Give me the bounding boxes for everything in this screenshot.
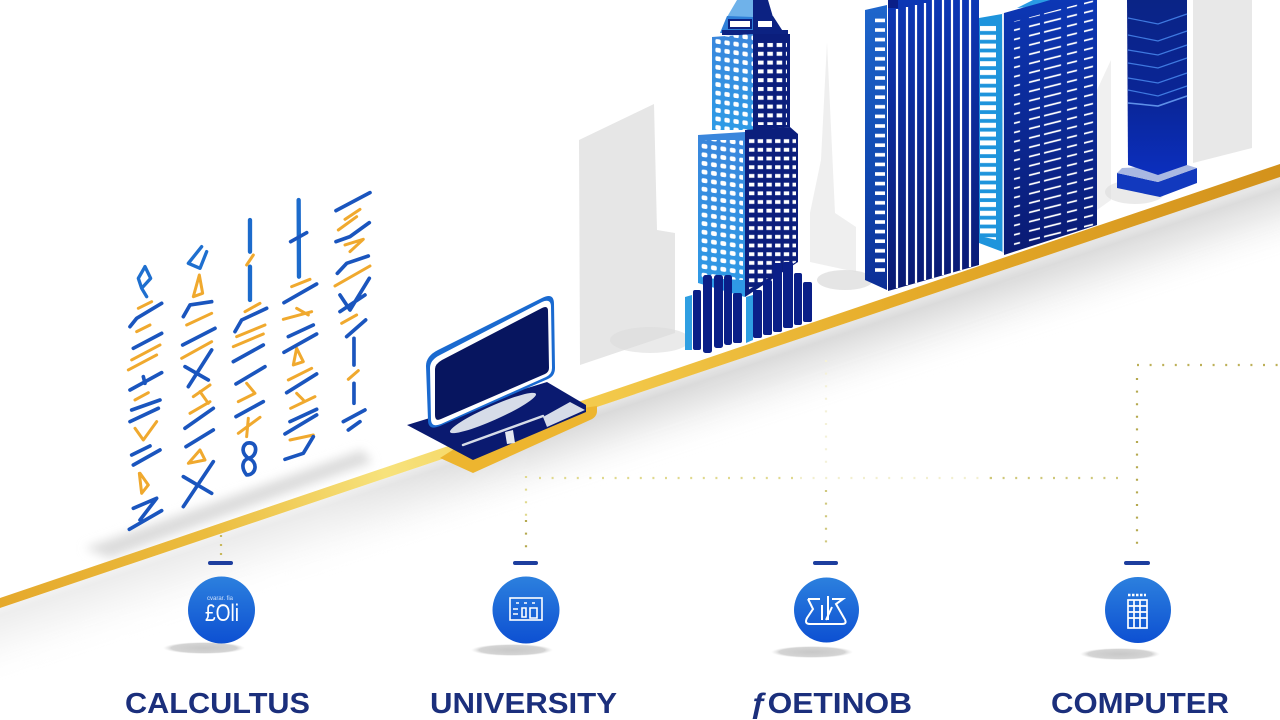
label: university: UNIVERSITY	[430, 688, 617, 720]
shadow buildings	[579, 0, 1252, 365]
label: computer: COMPUTER	[1051, 688, 1229, 720]
formula columns	[128, 193, 370, 529]
column 3	[233, 220, 267, 475]
ground shadow below gold line	[0, 177, 1280, 642]
laptop screen	[426, 296, 555, 428]
base bars	[685, 262, 812, 353]
skyscraper 3	[979, 0, 1097, 255]
skyscraper 2	[865, 0, 979, 291]
node: calculus: cvarar. fia	[207, 596, 234, 602]
column shadow	[85, 450, 372, 558]
node: calculus	[125, 561, 310, 720]
laptop	[407, 296, 597, 473]
tower with plinth	[1117, 0, 1197, 197]
dotted connectors	[221, 360, 1280, 558]
laptop gold base	[440, 406, 597, 473]
label: calculus: CALCULTUS	[125, 688, 310, 720]
column 4	[283, 200, 317, 459]
node: university	[430, 561, 617, 720]
column 2	[182, 247, 215, 507]
upper section	[712, 34, 753, 130]
label: foetinob: ƒOETINOB	[750, 688, 912, 720]
node: foetinob	[750, 561, 912, 720]
gold line	[0, 164, 1280, 608]
spire cap	[720, 0, 788, 35]
column 1	[128, 267, 162, 529]
column 5	[335, 193, 370, 430]
laptop keyboard deck	[407, 382, 586, 460]
node: computer	[1051, 561, 1229, 720]
skyscraper 1	[685, 0, 812, 353]
node: calculus: £Oli	[205, 600, 239, 627]
middle section	[698, 132, 745, 297]
